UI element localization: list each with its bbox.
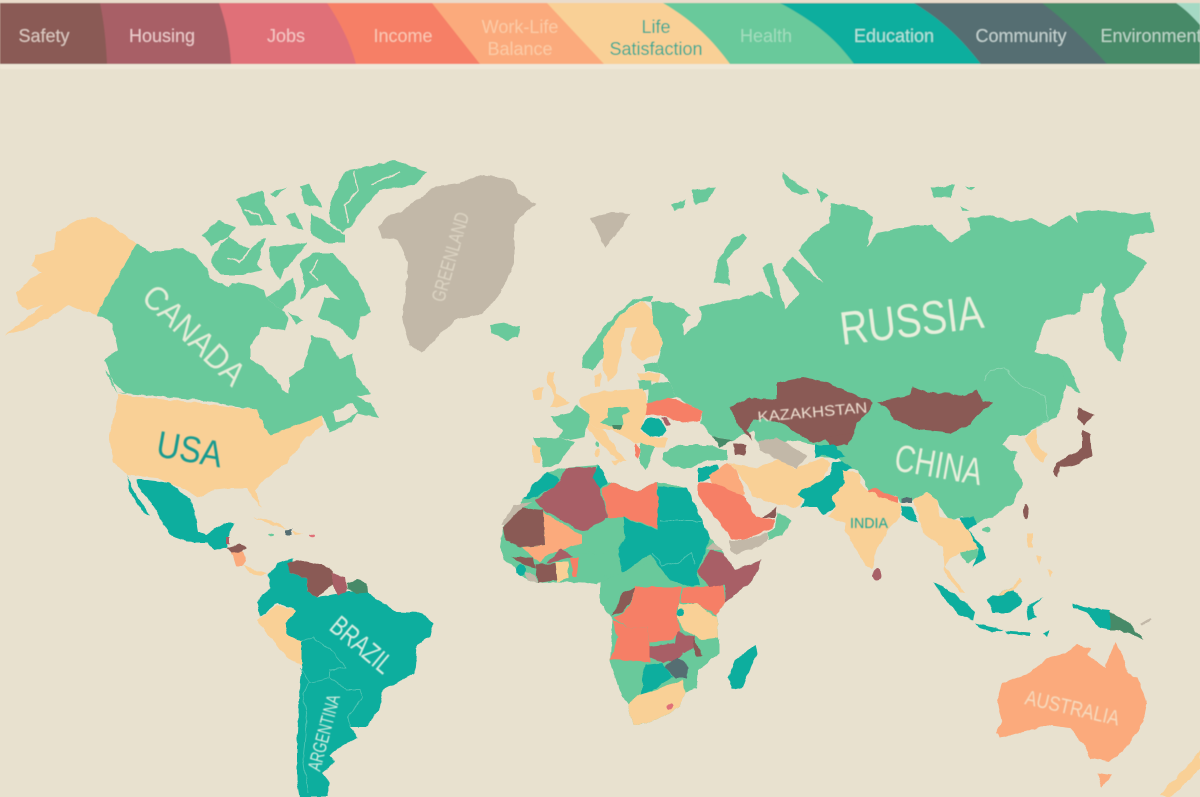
header: category ribbon bbox=[0, 0, 1200, 69]
country: Vietnam bbox=[958, 517, 987, 568]
internal borders bbox=[302, 637, 363, 727]
country: Niger bbox=[568, 518, 625, 555]
country: Ivory Coast bbox=[535, 563, 557, 583]
country: Angola bbox=[610, 620, 650, 662]
Central America and Caribbean bbox=[226, 517, 315, 576]
Gulf of St Lawrence bbox=[333, 403, 358, 422]
Myanmar, Thailand, Laos bbox=[913, 492, 978, 593]
country: India bbox=[828, 470, 902, 570]
country: Tajikistan bbox=[815, 445, 845, 460]
country: Bhutan bbox=[902, 498, 912, 502]
country: Venezuela bbox=[287, 560, 333, 597]
region: North America bbox=[5, 160, 536, 576]
country: Tasmania bbox=[1097, 773, 1112, 788]
country: Tunisia bbox=[593, 465, 607, 490]
label: Greenland: GREENLAND bbox=[429, 210, 474, 304]
country: Guinea bbox=[512, 557, 535, 570]
country: Sierra Leone bbox=[516, 565, 526, 575]
country: Chad bbox=[617, 517, 657, 573]
country: Zambia bbox=[650, 632, 695, 663]
label: Australia: AUSTRALIA bbox=[1023, 686, 1122, 730]
label: Brazil: BRAZIL bbox=[324, 610, 399, 680]
country: Alaska bbox=[5, 217, 137, 335]
Africa base bbox=[500, 465, 762, 725]
Arctic islands bbox=[104, 160, 427, 395]
region: Middle East and Central Asia bbox=[698, 438, 852, 555]
region: Oceania bbox=[996, 642, 1200, 797]
country: Indonesia bbox=[933, 582, 1110, 637]
country: Taiwan bbox=[1023, 505, 1029, 519]
country: Ethiopia and Somalia bbox=[697, 550, 762, 603]
country: Kyrgyzstan bbox=[823, 433, 855, 447]
country: Japan bbox=[1053, 407, 1095, 477]
label: Work-Life Balance: Balance bbox=[487, 39, 553, 59]
country: Armenia and Azerbaijan bbox=[733, 443, 747, 455]
country: Mozambique bbox=[682, 640, 720, 692]
label: Education: Education bbox=[854, 26, 934, 46]
Solomon Islands bbox=[1140, 618, 1151, 626]
country: Italy bbox=[588, 423, 627, 463]
country: Iraq bbox=[698, 465, 720, 482]
country: Moldova bbox=[661, 417, 670, 425]
Arctic Russian islands bbox=[670, 172, 975, 285]
label: Safety: Safety bbox=[18, 26, 70, 46]
Malaysian Borneo bbox=[997, 578, 1022, 595]
country: Iceland bbox=[490, 323, 520, 340]
label: Work-Life Balance: Work-Life bbox=[482, 17, 558, 37]
country: Belarus bbox=[648, 382, 677, 403]
country: Cambodia bbox=[960, 548, 978, 563]
country: Korea bbox=[1025, 428, 1047, 462]
country: Mali bbox=[522, 512, 582, 563]
Arctic channels bbox=[228, 172, 400, 280]
country: Libya bbox=[602, 482, 660, 530]
country: Guyana bbox=[332, 573, 347, 595]
country: Pakistan bbox=[797, 462, 852, 515]
country: Algeria bbox=[535, 467, 608, 532]
region: Europe bbox=[532, 295, 747, 470]
Cameroon and CAR bbox=[600, 562, 670, 593]
Mediterranean islands and Balkans bbox=[594, 441, 655, 470]
country: Benin bbox=[570, 558, 580, 577]
country: Canada mainland bbox=[96, 243, 379, 435]
label: Life Satisfaction: Satisfaction bbox=[609, 39, 703, 59]
region: South America bbox=[257, 558, 433, 797]
Baja California bbox=[127, 475, 150, 515]
country: Australia bbox=[996, 642, 1147, 762]
country: Philippines bbox=[1027, 533, 1053, 577]
country: Iran and Afghanistan bbox=[728, 458, 830, 508]
label: Health: Health bbox=[740, 26, 792, 46]
label: Argentina: ARGENTINA bbox=[305, 692, 345, 773]
label: Life Satisfaction: Life bbox=[641, 17, 671, 37]
country: Saudi Arabia bbox=[698, 483, 775, 540]
country: Lesotho bbox=[667, 703, 673, 709]
country: Djibouti bbox=[707, 543, 722, 550]
map labels bbox=[134, 210, 1122, 773]
country: Ghana bbox=[555, 562, 568, 582]
country: Mongolia bbox=[878, 387, 993, 433]
Jordan and north Saudi bbox=[710, 463, 745, 495]
country: Romania bbox=[640, 418, 667, 437]
country: Sweden and Finland bbox=[603, 300, 663, 382]
country: Tanzania bbox=[678, 603, 718, 640]
label: Environment: Environment bbox=[1100, 26, 1200, 46]
Sakhalin bbox=[1059, 357, 1080, 393]
label: Housing: Housing bbox=[129, 26, 195, 46]
country: Gabon bbox=[600, 595, 620, 613]
country: Georgia bbox=[712, 437, 733, 447]
country: Mexico bbox=[137, 480, 235, 550]
country: Burkina Faso bbox=[547, 548, 573, 563]
Egypt and Sudan bbox=[650, 487, 710, 587]
country: Bangladesh bbox=[902, 505, 918, 523]
country: Western Sahara bbox=[502, 502, 533, 525]
country: Zimbabwe bbox=[665, 657, 688, 678]
country: Yemen bbox=[730, 533, 767, 555]
country: Portugal bbox=[533, 445, 540, 463]
region: Africa bbox=[500, 465, 762, 725]
country: Sri Lanka bbox=[873, 568, 881, 580]
country: Spain bbox=[533, 438, 575, 467]
country: Kazakhstan bbox=[730, 377, 873, 443]
country: USA bbox=[109, 395, 323, 508]
region: South and East Asia bbox=[828, 407, 1151, 640]
country: Rwanda bbox=[678, 608, 684, 616]
Central Europe bbox=[578, 388, 667, 447]
region: Russia and China landmass bbox=[590, 172, 1155, 523]
label: Kazakhstan: KAZAKHSTAN bbox=[757, 399, 868, 426]
label: Canada: CANADA bbox=[134, 277, 253, 394]
country: Norway bbox=[582, 295, 653, 370]
world map shapes bbox=[5, 160, 1200, 797]
country: Nepal bbox=[868, 488, 898, 503]
label: Community: Community bbox=[975, 26, 1067, 46]
country: Senegal bbox=[500, 542, 523, 557]
Central Europe green block bbox=[600, 407, 630, 427]
Baltic states bbox=[637, 362, 660, 390]
country: Greenland bbox=[378, 175, 536, 353]
country: Oman bbox=[767, 512, 792, 540]
Uganda and Kenya bbox=[680, 585, 725, 615]
Kamchatka bbox=[1101, 287, 1127, 363]
country: Peru bbox=[257, 605, 302, 665]
Hainan bbox=[982, 527, 990, 533]
country: Morocco bbox=[523, 472, 560, 500]
country: Liberia bbox=[525, 572, 538, 583]
country: Papua New Guinea bbox=[1110, 612, 1143, 640]
country: Mauritania bbox=[503, 508, 545, 547]
label: Income: Income bbox=[373, 26, 433, 46]
country: Republic of Congo bbox=[610, 588, 635, 615]
country: Malawi bbox=[693, 637, 702, 657]
country: Denmark bbox=[594, 373, 601, 386]
country: Russia and China bbox=[650, 203, 1155, 523]
country: France bbox=[550, 405, 590, 440]
label: Jobs: Jobs bbox=[267, 26, 305, 46]
country: Madagascar bbox=[728, 645, 757, 690]
label: Russia: RUSSIA bbox=[837, 285, 987, 355]
country: New Zealand bbox=[1160, 750, 1200, 797]
country: Svalbard bbox=[590, 212, 630, 248]
label: USA: USA bbox=[154, 424, 226, 475]
country: Ireland bbox=[532, 387, 543, 400]
country: Botswana bbox=[642, 663, 673, 695]
label: India: INDIA bbox=[850, 515, 888, 532]
country: UK bbox=[547, 371, 570, 407]
Sudan borders bbox=[660, 520, 701, 522]
country: South Africa bbox=[628, 680, 685, 725]
country: Brazil and neighbours bbox=[257, 558, 433, 797]
country: UAE bbox=[762, 507, 777, 518]
country: Turkmenistan bbox=[757, 438, 807, 468]
country: Namibia bbox=[610, 662, 643, 703]
country: Suriname and French Guiana bbox=[347, 580, 368, 593]
Manchuria border bbox=[985, 368, 1048, 427]
country: Nigeria bbox=[578, 553, 618, 585]
country: Turkey bbox=[663, 445, 727, 468]
country: DR Congo bbox=[613, 587, 682, 642]
country: Ukraine bbox=[645, 398, 703, 422]
label: China: CHINA bbox=[891, 438, 986, 494]
